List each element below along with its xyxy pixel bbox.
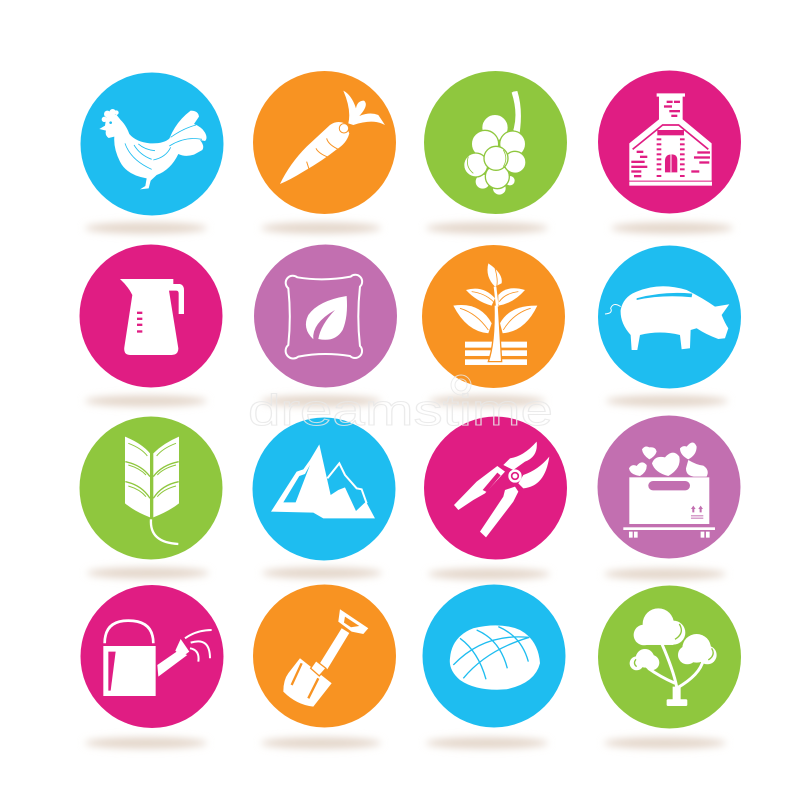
- icon: farmhouse: [629, 93, 712, 186]
- icon: seedling: [453, 263, 537, 365]
- icon: tree: [630, 608, 717, 706]
- seed sack badge: [254, 244, 397, 388]
- measuring jug badge: [80, 244, 222, 388]
- grapes badge: [424, 71, 567, 214]
- crate of fruit badge: [598, 416, 740, 558]
- icon: pig: [605, 286, 729, 350]
- icon: crate of fruit: [623, 442, 715, 538]
- icon: watering can: [103, 621, 212, 696]
- icon: rooster: [99, 109, 206, 189]
- tree badge: [598, 586, 741, 728]
- shovel badge: [253, 584, 396, 728]
- carrot badge: [253, 71, 396, 214]
- icon: carrot: [280, 91, 385, 184]
- pruning shears badge: [424, 416, 567, 560]
- icon: measuring jug: [120, 279, 184, 355]
- bread badge: [422, 584, 566, 728]
- icon: pruning shears: [454, 442, 549, 537]
- icon: grapes: [464, 91, 526, 195]
- icon: wheat: [125, 437, 179, 544]
- icon: mountain: [271, 444, 375, 518]
- rooster badge: [80, 72, 224, 216]
- icon: bread loaf: [450, 625, 540, 690]
- mountain badge: [252, 418, 396, 560]
- icon: seed sack: [286, 275, 362, 358]
- watermark: [248, 375, 553, 435]
- pig badge: [598, 246, 741, 388]
- wheat badge: [80, 416, 222, 560]
- watering can badge: [80, 585, 224, 728]
- farmhouse badge: [598, 70, 741, 214]
- watermark: dreamstime: [248, 386, 553, 435]
- seedling badge: [422, 245, 565, 388]
- icon: shovel: [283, 609, 368, 707]
- drop shadows under circles: [85, 222, 733, 748]
